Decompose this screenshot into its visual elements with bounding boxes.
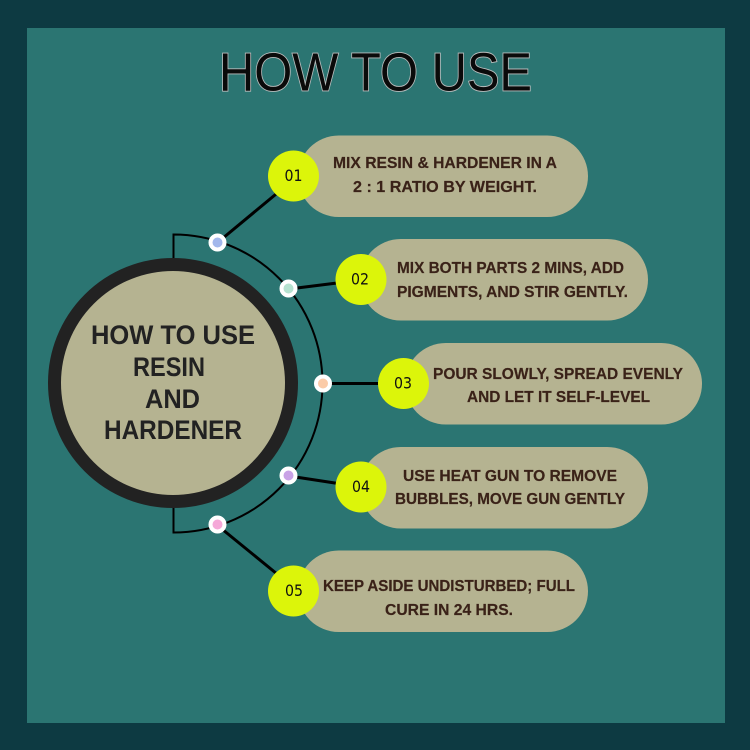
step 01: 01: [284, 166, 302, 185]
step 02: PIGMENTS, AND STIR GENTLY.: [397, 284, 628, 301]
step 03: 03: [394, 374, 412, 392]
central circle: how to use resin and hardener: AND: [145, 384, 200, 414]
step 05: [268, 550, 588, 632]
step 04: [336, 447, 648, 528]
step 02: [336, 239, 648, 320]
step 01: MIX RESIN & HARDENER IN A: [333, 155, 557, 172]
title: HOW TO USE: [219, 42, 532, 102]
step 02: MIX BOTH PARTS 2 MINS, ADD: [397, 260, 624, 277]
connector lines: [217, 180, 403, 587]
node dot 2: [282, 282, 296, 296]
node dot 4: [282, 468, 296, 482]
step 02: 02: [351, 270, 369, 288]
node dot 5: [210, 518, 224, 532]
step 03: [378, 343, 702, 424]
central circle: how to use resin and hardener: HOW TO USE: [91, 320, 255, 350]
central circle: how to use resin and hardener: HARDENER: [104, 415, 242, 445]
connector bracket arc: [174, 234, 323, 532]
node dot 1: [210, 236, 224, 250]
node dot 3: [316, 376, 330, 390]
step 01: 2 : 1 RATIO BY WEIGHT.: [353, 179, 537, 196]
step 04: USE HEAT GUN TO REMOVE: [403, 468, 617, 485]
step 04: BUBBLES, MOVE GUN GENTLY: [395, 491, 625, 508]
central circle: how to use resin and hardener: RESIN: [133, 352, 205, 382]
step 05: CURE IN 24 HRS.: [385, 602, 513, 619]
step 01: [268, 136, 588, 217]
step 05: 05: [285, 581, 303, 600]
step 03: AND LET IT SELF-LEVEL: [467, 389, 650, 406]
step 05: KEEP ASIDE UNDISTURBED; FULL: [323, 578, 575, 595]
step 03: POUR SLOWLY, SPREAD EVENLY: [433, 366, 683, 383]
step 04: 04: [352, 477, 370, 496]
central circle: how to use resin and hardener: [54, 264, 292, 502]
